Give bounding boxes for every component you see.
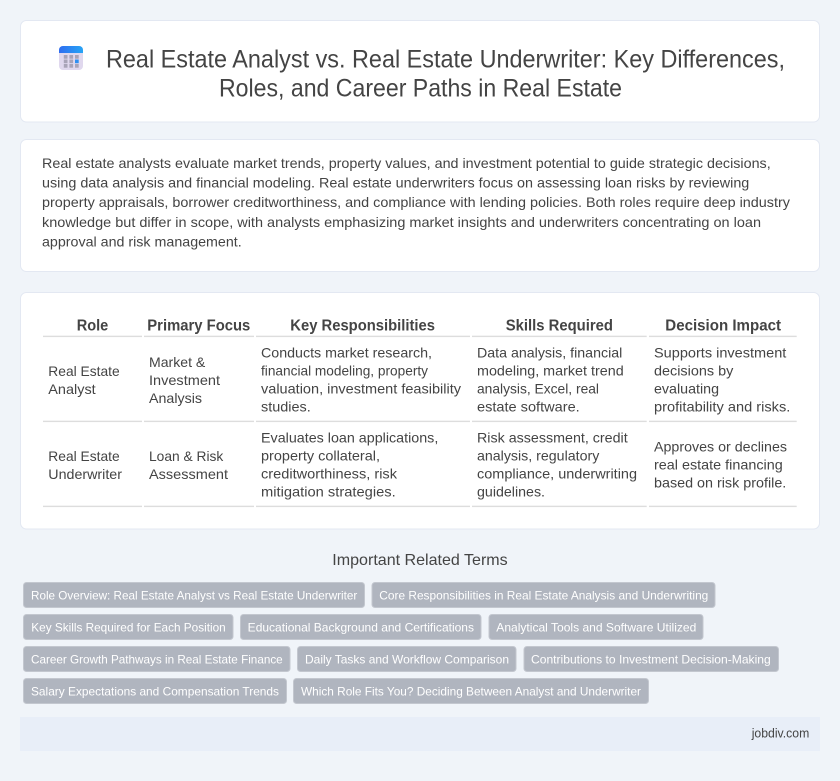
table row: real estate underwriter: Evaluates loan applications, [261,430,438,446]
tag: contributions: Contributions to Investment Decision-Making [531,652,771,666]
tag: educational background: Educational Background and Certifications [248,620,474,634]
title [106,46,785,102]
tag: daily tasks: Daily Tasks and Workflow Comparison [305,652,509,666]
table row: real estate underwriter: mitigation strategies. [261,484,396,500]
related terms tags [24,582,778,704]
table row: real estate underwriter: Real Estate [48,448,120,464]
tag: educational background [240,614,481,640]
tag: role overview [24,582,364,608]
table row: real estate underwriter: based on risk profile. [654,475,786,491]
table row: real estate underwriter: Assessment [149,466,228,482]
table header row: Decision Impact [665,318,782,335]
table row: real estate analyst: Data analysis, financial [477,345,622,361]
table row: real estate underwriter: Underwriter [48,466,122,482]
table row: real estate underwriter: compliance, underwriting [477,466,637,482]
table row: real estate analyst: Investment [149,372,220,388]
tag: salary expectations: Salary Expectations and Compensation Trends [31,684,279,698]
table row: real estate analyst: Real Estate [48,363,120,379]
panel: header [20,20,820,122]
table row: real estate analyst: decisions by [654,363,733,379]
tag: daily tasks [298,646,516,672]
tag: core responsibilities [372,582,715,608]
table row: real estate analyst: modeling, market trend [477,363,624,379]
tag: which role fits: Which Role Fits You? Deciding Between Analyst and Underwriter [301,684,641,698]
table row: real estate analyst: analysis, Excel, real [477,381,599,397]
footer [20,717,820,751]
table row: real estate underwriter: creditworthiness, risk [261,466,398,482]
table row: real estate analyst: financial modeling, property [261,363,428,379]
table row: real estate analyst: Supports investment [654,345,786,361]
tag: salary expectations [24,678,286,704]
title: Real Estate Analyst vs. Real Estate Underwriter: Key Differences, [106,46,785,74]
tag: which role fits [294,678,648,704]
tag: core responsibilities: Core Responsibilities in Real Estate Analysis and Underwriting [379,588,708,602]
summary paragraph: Real estate analysts evaluate market trends, property values, and investment potential to guide strategic decisions, [42,155,771,171]
tag: career growth [24,646,290,672]
tag: analytical tools: Analytical Tools and Software Utilized [496,620,696,634]
table row: real estate analyst: studies. [261,399,311,415]
summary paragraph: knowledge but differ in scope, with analysts emphasizing market insights and underwriters concentrating on loan [42,214,761,230]
tag: career growth: Career Growth Pathways in Real Estate Finance [31,652,283,666]
table row: real estate analyst: profitability and risks. [654,399,790,415]
table row: real estate analyst: valuation, investment feasibility [261,381,461,397]
table row: real estate analyst: Conducts market research, [261,345,432,361]
table row: real estate underwriter [48,430,787,500]
icon: calendar [59,46,83,70]
table row: real estate underwriter: real estate financing [654,457,783,473]
table row: real estate analyst: evaluating [654,381,719,397]
summary paragraph: property appraisals, borrower creditworthiness, and compliance with lending policies. Both roles require deep industry [42,194,790,210]
table header row: Skills Required [506,318,613,335]
tag: key skills: Key Skills Required for Each Position [31,620,226,634]
table header row [77,318,782,335]
table row: real estate underwriter: Loan & Risk [149,448,224,464]
tag: analytical tools [489,614,703,640]
heading: important related terms: Important Related Terms [332,552,508,569]
tag: role overview: Role Overview: Real Estate Analyst vs Real Estate Underwriter [31,588,357,602]
table header row: Key Responsibilities [290,318,435,335]
summary paragraph [42,155,790,249]
summary paragraph: approval and risk management. [42,233,242,249]
summary paragraph: using data analysis and financial modeling. Real estate underwriters focus on assessing loan risks by reviewing [42,175,749,191]
table row: real estate underwriter: guidelines. [477,484,545,500]
table row: real estate underwriter: Risk assessment, credit [477,430,628,446]
table header row: Role [77,318,108,335]
footer site name: jobdiv.com [751,727,809,741]
tag: contributions [524,646,778,672]
title: Roles, and Career Paths in Real Estate [219,74,622,102]
table row: real estate analyst: Market & [149,354,206,370]
table row: real estate underwriter: Approves or declines [654,439,787,455]
table row: real estate analyst: Analysis [149,390,202,406]
panel: summary [20,140,820,272]
table row: real estate analyst: Analyst [48,381,96,397]
table row: real estate underwriter: property collateral, [261,448,380,464]
table row: real estate analyst: estate software. [477,399,580,415]
table row: real estate analyst [48,345,790,415]
table header row: Primary Focus [147,318,250,335]
tag: key skills [24,614,233,640]
panel: comparison table [20,292,820,529]
table row: real estate underwriter: analysis, regulatory [477,448,599,464]
